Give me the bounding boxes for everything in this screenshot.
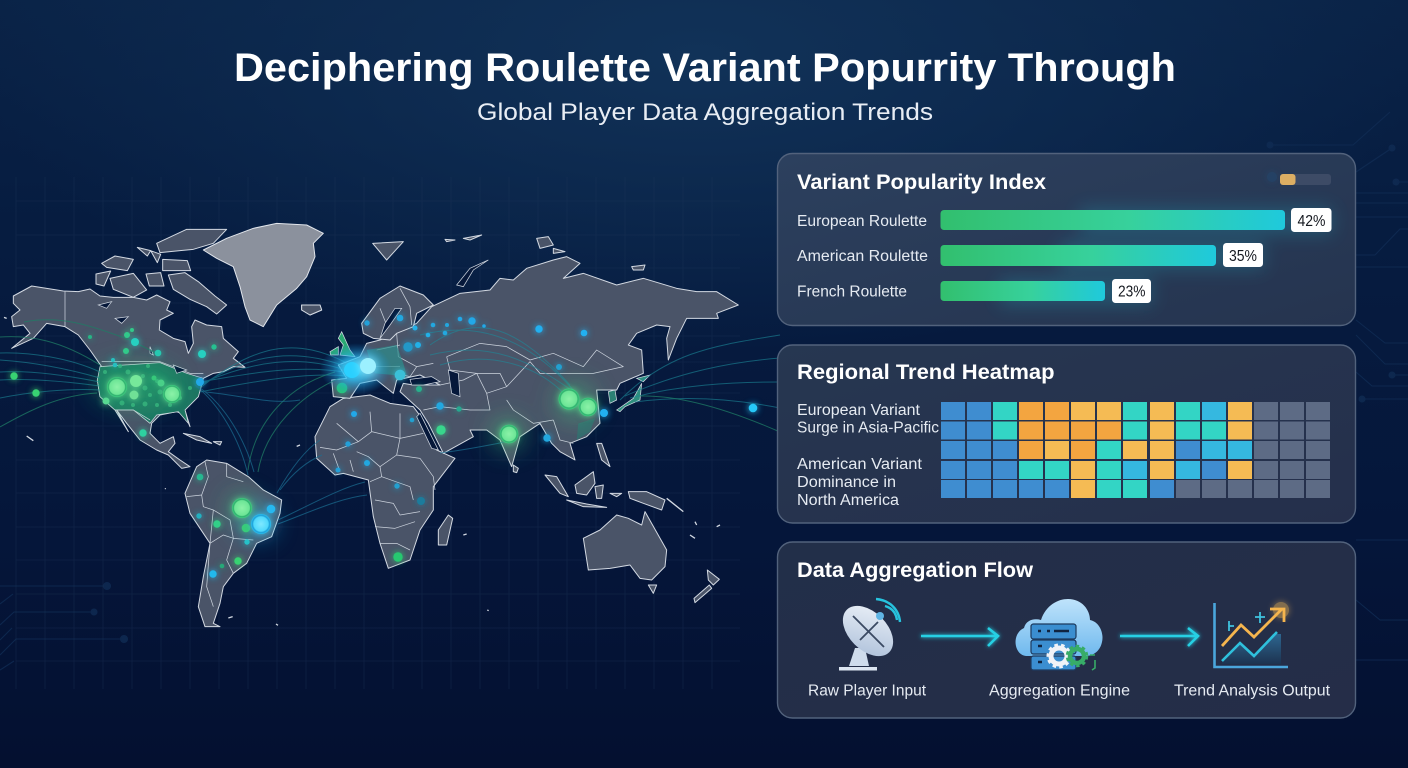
indicator pill	[1267, 172, 1331, 185]
Central Europe tint	[367, 345, 407, 375]
panel: regional trend heatmap	[778, 345, 1356, 523]
subtitle: Global Player Data Aggregation Trends	[477, 99, 933, 126]
heatmap label: American variant dominance: American Variant	[797, 456, 923, 473]
bar: European Roulette: European Roulette	[797, 213, 927, 230]
Australia	[583, 512, 667, 580]
Africa	[315, 395, 455, 568]
North America borders	[65, 291, 203, 420]
Scandinavia borders	[380, 288, 412, 338]
Asia borders	[373, 333, 623, 443]
heatmap label: European variant surge: Surge in Asia-Pacific	[797, 420, 939, 436]
arrow: input to engine	[921, 628, 998, 646]
bar: American Roulette	[797, 243, 1263, 267]
Africa borders	[320, 412, 435, 550]
flow label: trend analysis output: Trend Analysis Output	[1174, 682, 1331, 700]
bar: American Roulette: American Roulette	[797, 248, 928, 265]
Eurasia, Africa and Oceania	[302, 235, 738, 611]
heat glows	[93, 363, 595, 538]
heatmap label: American variant dominance	[797, 456, 923, 509]
bar: French Roulette: French Roulette	[797, 284, 907, 300]
Eurasia	[332, 257, 738, 467]
bar glows	[1000, 208, 1332, 305]
map grid	[16, 177, 740, 689]
North America	[12, 286, 245, 468]
heading: regional trend heatmap: Regional Trend Heatmap	[797, 361, 1054, 384]
South East Asia islands	[545, 443, 665, 510]
Korea	[608, 390, 617, 403]
icon: satellite dish	[833, 596, 903, 670]
South America borders	[187, 462, 253, 607]
inland seas	[380, 260, 488, 397]
Madagascar	[438, 515, 453, 545]
United Kingdom and Ireland	[330, 332, 355, 357]
Americas landmass	[4, 223, 323, 627]
title: Deciphering Roulette Variant Popurrity Through	[234, 46, 1176, 90]
arrow: engine to output	[1120, 628, 1198, 646]
heading: data aggregation flow: Data Aggregation Flow	[797, 559, 1034, 582]
China south coast highlight	[577, 418, 595, 440]
player dots: green	[10, 328, 597, 568]
Iceland	[302, 305, 322, 315]
United States highlight	[97, 363, 203, 423]
icon: cloud aggregation engine	[1016, 599, 1102, 670]
heatmap label: American variant dominance: North America	[797, 492, 899, 509]
data flow lines	[0, 320, 780, 524]
Japan	[617, 375, 650, 412]
Arctic islands	[96, 229, 227, 445]
bar: French Roulette: 23%	[1118, 284, 1146, 300]
Greenland	[203, 223, 323, 327]
Tasmania	[648, 585, 657, 593]
bar: French Roulette	[797, 279, 1151, 303]
circuit decoration: right	[1267, 112, 1408, 660]
panel: variant popularity index	[778, 154, 1356, 326]
flow label: raw player input: Raw Player Input	[808, 682, 927, 700]
icon: trend chart	[1214, 602, 1289, 667]
Arctic Russian islands	[302, 235, 645, 315]
heatmap label: European variant surge	[797, 402, 939, 436]
bar: American Roulette: 35%	[1229, 248, 1257, 265]
small American islands	[4, 317, 300, 625]
heatmap label: American variant dominance: Dominance in	[797, 474, 896, 491]
bar: European Roulette: 42%	[1298, 213, 1326, 230]
Scandinavia	[362, 286, 433, 340]
Sri Lanka	[513, 465, 518, 473]
player dots: cyan	[111, 315, 757, 578]
heatmap grid	[941, 402, 1330, 498]
small player clusters USA	[103, 364, 192, 407]
South America	[185, 460, 282, 627]
flow label: aggregation engine: Aggregation Engine	[989, 682, 1130, 700]
red sea gulf	[417, 413, 438, 450]
panel: data aggregation flow	[778, 542, 1356, 718]
heading: variant popularity index: Variant Popularity Index	[797, 171, 1046, 194]
New Zealand	[694, 570, 719, 603]
circuit decoration: left	[0, 582, 128, 670]
small eastern islands	[463, 498, 720, 611]
Europe hot spot	[320, 343, 392, 395]
bar: European Roulette	[797, 208, 1332, 232]
heatmap label: European variant surge: European Variant	[797, 402, 921, 419]
world map	[0, 223, 780, 627]
